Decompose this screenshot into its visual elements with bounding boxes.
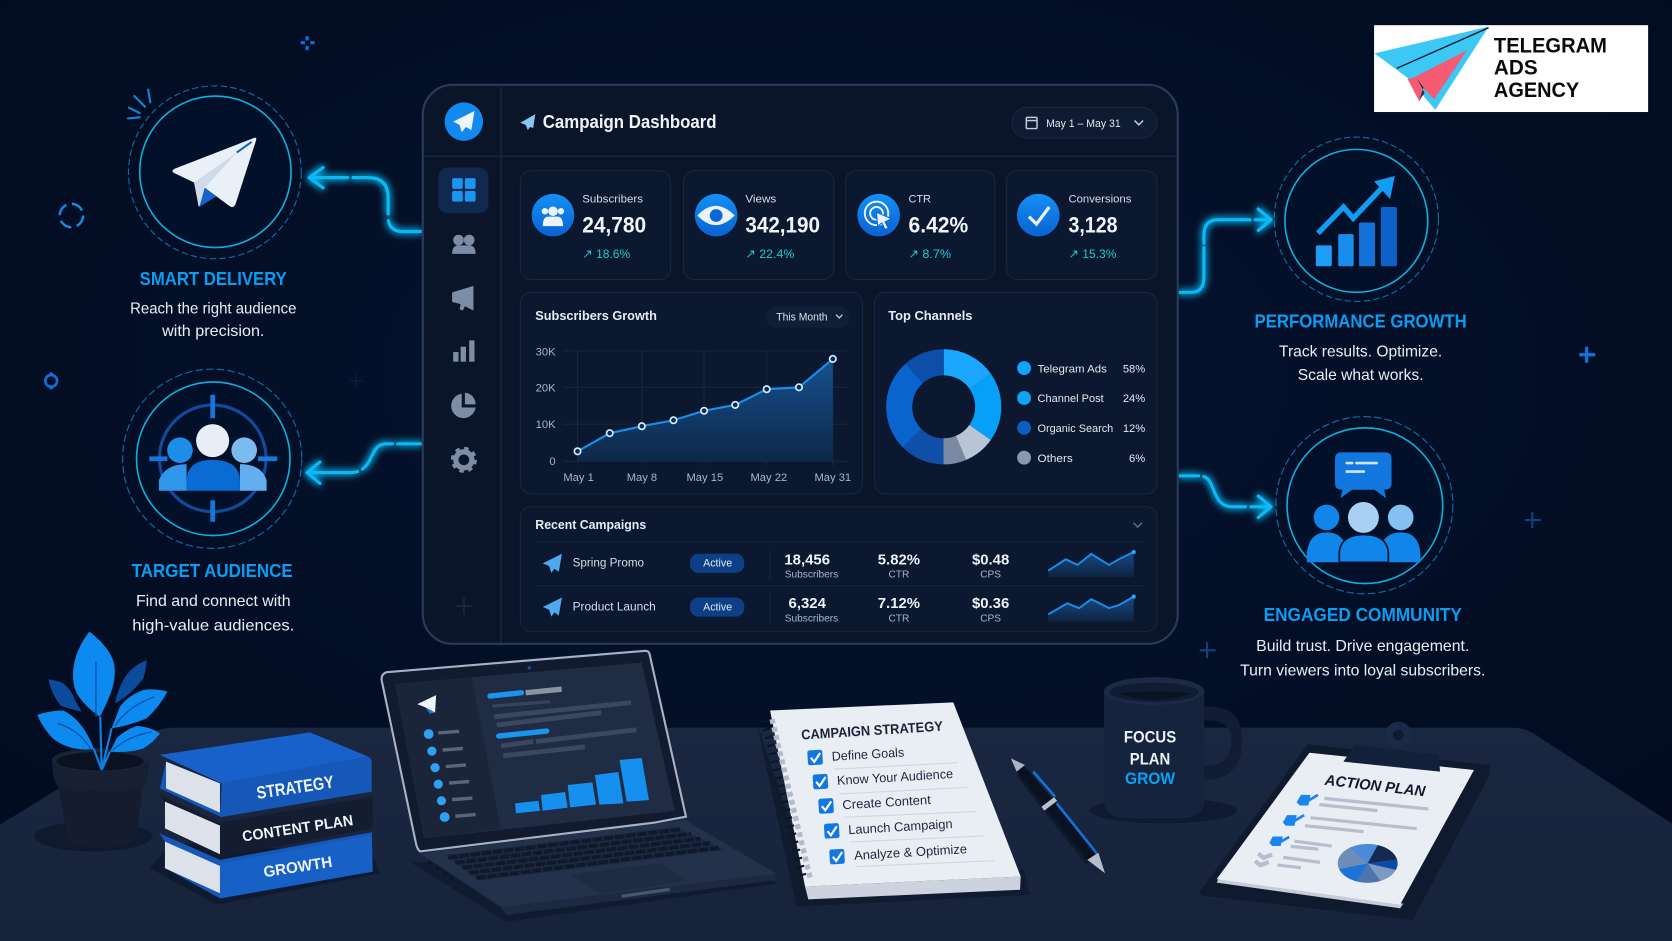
logo: telegram ads agency (1374, 25, 1648, 112)
arrow: dashboard to engaged community (1179, 476, 1271, 517)
kpi card: subscribers: Subscribers (582, 194, 643, 206)
line chart: May 8 (627, 472, 657, 484)
kpi card: ctr: 8.7% (922, 247, 951, 261)
line chart: 0 (549, 456, 556, 468)
icon: growth chart in ring (1274, 137, 1438, 301)
kpi card: conversions: 3,128 (1068, 213, 1118, 238)
laptop base (412, 820, 778, 922)
feature: target audience (123, 369, 302, 635)
kpi card: conversions: 15.3% (1082, 247, 1117, 261)
feature: smart delivery (128, 86, 301, 340)
text block: Track results. Optimize. (1279, 343, 1442, 360)
mug text: FOCUS (1124, 728, 1176, 747)
row: product launch: 6,324 (789, 595, 827, 612)
line chart: 10K (536, 419, 556, 431)
text block: Turn viewers into loyal subscribers. (1240, 662, 1485, 679)
row: spring promo: 5.82% (878, 551, 920, 568)
notebook: campaign strategy (757, 702, 1029, 907)
text block: Scale what works. (1298, 367, 1424, 384)
checklist: Launch Campaign (848, 816, 953, 837)
row: product launch: Product Launch (573, 600, 656, 613)
row: spring promo: 18,456 (784, 551, 830, 568)
legend: 24% (1123, 393, 1145, 405)
kpi card: subscribers: 18.6% (596, 247, 630, 261)
heading: SMART DELIVERY (140, 268, 287, 289)
legend: 58% (1123, 363, 1145, 375)
pie chart (1338, 844, 1398, 883)
kpi card: subscribers (520, 171, 671, 280)
heading: ENGAGED COMMUNITY (1264, 604, 1462, 625)
kpi card: ctr: ↗ (909, 247, 919, 261)
panel: top channels (874, 292, 1157, 494)
kpi card: views (684, 171, 834, 280)
arrow: dashboard to performance growth (1179, 209, 1271, 292)
row: spring promo: $0.48 (972, 551, 1009, 568)
panel: subscribers growth (520, 292, 863, 494)
kpi card: views: 342,190 (745, 213, 820, 238)
heading: Subscribers Growth (535, 308, 657, 323)
legend: Telegram Ads (1038, 363, 1107, 375)
text block: Reach the right audience (130, 301, 296, 318)
book: growth (159, 832, 373, 898)
icon: megaphone (452, 286, 473, 310)
legend: Organic Search (1038, 423, 1113, 435)
panel: campaign dashboard (423, 85, 1178, 644)
legend: Others (1038, 453, 1073, 465)
decorative sparkles (45, 36, 1595, 658)
checklist: Define Goals (831, 744, 905, 764)
kpi card: views: 22.4% (759, 247, 795, 261)
icon: title plane (520, 114, 535, 130)
arrow: dashboard to smart delivery (309, 168, 421, 232)
logo: telegram ads agency: ADS (1494, 56, 1538, 80)
heading: TARGET AUDIENCE (132, 560, 293, 581)
checklist lines (1277, 798, 1428, 868)
row: product launch: CTR (889, 613, 909, 624)
line chart: May 22 (750, 472, 787, 484)
kpi card: ctr: 6.42% (909, 213, 968, 238)
legend: 12% (1123, 423, 1145, 435)
clipboard: action plan (1202, 722, 1488, 918)
icon: pie (451, 393, 476, 418)
book: growth: GROWTH (262, 854, 333, 881)
date picker (1012, 107, 1157, 138)
text block (130, 301, 296, 340)
text block (1240, 638, 1485, 679)
logo: telegram ads agency: TELEGRAM (1494, 33, 1607, 57)
spiral binding (765, 719, 810, 879)
dashboard header (520, 107, 1157, 138)
row: product launch: CPS (980, 613, 1001, 624)
kpi card: subscribers: 24,780 (582, 213, 646, 238)
mug text: GROW (1125, 769, 1176, 788)
icon: logo (445, 102, 483, 141)
book: content plan: CONTENT PLAN (241, 812, 354, 845)
kpi card: views: Views (745, 194, 777, 206)
kpi card: subscribers: ↗ (582, 247, 592, 261)
book: strategy (160, 732, 372, 817)
check marks (1255, 795, 1318, 865)
mug text: PLAN (1130, 749, 1170, 768)
laptop (382, 651, 778, 922)
line chart: May 1 (563, 472, 594, 484)
logo: telegram ads agency: AGENCY (1494, 78, 1579, 102)
arrow: dashboard to target audience (307, 444, 421, 483)
panel: recent campaigns (520, 507, 1157, 632)
plant (34, 632, 167, 851)
text block (1279, 343, 1442, 384)
mug text (1124, 728, 1176, 788)
kpi card: views: ↗ (745, 247, 756, 261)
kpi card: ctr (846, 171, 995, 280)
text block: with precision. (161, 323, 264, 340)
laptop screen (382, 651, 686, 851)
kpi card: conversions (1007, 171, 1157, 280)
icon: community with chat bubble (1276, 417, 1453, 594)
kpi card: conversions: ↗ (1068, 247, 1079, 261)
icon: audience (452, 235, 476, 254)
row: spring promo: CPS (980, 570, 1001, 581)
feature: performance growth (1255, 137, 1467, 384)
legend (1017, 361, 1145, 465)
date picker: May 1 – May 31 (1046, 118, 1121, 130)
row: spring promo: Subscribers (785, 570, 838, 581)
row: product launch: Subscribers (785, 613, 838, 624)
heading: ACTION PLAN (1323, 772, 1427, 800)
row: product launch: Active (703, 601, 732, 613)
title: Campaign Dashboard (543, 112, 717, 132)
book stack (150, 732, 380, 905)
row: spring promo (543, 550, 1136, 581)
line chart (536, 346, 851, 484)
row: product launch (543, 594, 1136, 624)
heading: Top Channels (888, 308, 972, 323)
checklist: Know Your Audience (837, 766, 953, 788)
row: spring promo: Active (703, 558, 732, 570)
icon: paper plane in ring (128, 86, 301, 259)
legend: Channel Post (1038, 393, 1105, 405)
kpi card: conversions: Conversions (1068, 194, 1132, 206)
text block (132, 593, 294, 635)
heading: Recent Campaigns (535, 517, 646, 532)
book: strategy: STRATEGY (255, 772, 335, 803)
checklist: Create Content (842, 792, 932, 812)
pen (1011, 758, 1105, 873)
icon: faint plus (455, 597, 472, 615)
text block: high-value audiences. (132, 618, 294, 635)
text block: Find and connect with (136, 593, 291, 610)
icon: dashboard active (438, 168, 488, 213)
text block: Build trust. Drive engagement. (1256, 638, 1469, 655)
heading: PERFORMANCE GROWTH (1255, 311, 1467, 332)
leaves (37, 632, 167, 770)
period selector (766, 306, 850, 328)
donut chart (899, 362, 988, 451)
icon: bars (453, 340, 475, 362)
legend: 6% (1129, 453, 1145, 465)
icon: gear (453, 449, 475, 471)
sidebar navigation (438, 102, 488, 615)
icon: audience target (123, 369, 302, 548)
row: product launch: 7.12% (878, 595, 920, 612)
line chart: May 15 (687, 472, 723, 484)
feature: engaged community (1240, 417, 1485, 679)
period selector: This Month (776, 312, 828, 324)
checklist (807, 744, 995, 867)
pot (52, 748, 148, 848)
clip (1343, 722, 1440, 772)
row: spring promo: Spring Promo (573, 557, 645, 570)
heading: CAMPAIGN STRATEGY (801, 718, 944, 743)
row: product launch: $0.36 (972, 595, 1009, 612)
row: spring promo: CTR (889, 570, 909, 581)
kpi card: ctr: CTR (909, 194, 931, 206)
mug (1090, 677, 1242, 823)
line chart: May 31 (814, 472, 851, 484)
line chart: 30K (536, 346, 556, 358)
book: content plan (160, 795, 373, 857)
desk surface (0, 728, 1672, 941)
checklist: Analyze & Optimize (854, 841, 967, 863)
line chart: 20K (536, 383, 556, 395)
